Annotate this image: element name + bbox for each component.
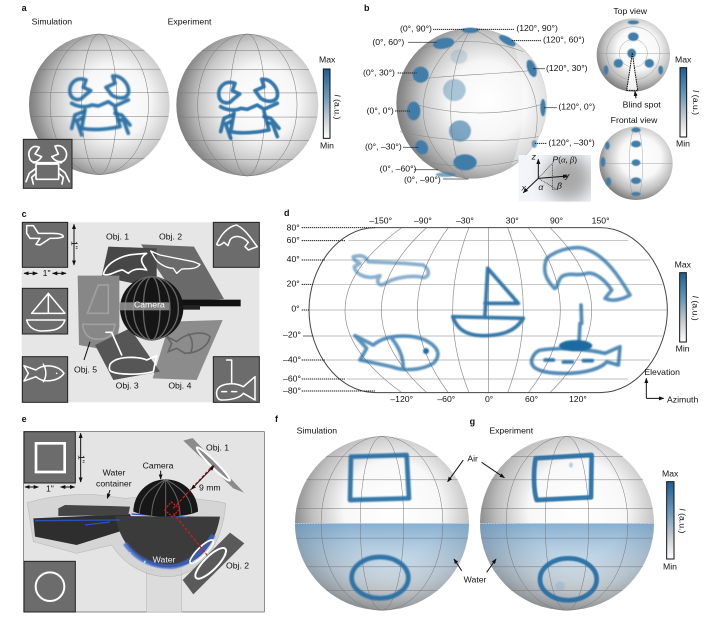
colour bar b: Min [676, 139, 690, 149]
inset: coordinate axes [518, 151, 592, 202]
azimuth tick labels: –120° [390, 394, 413, 404]
colour bar f g [662, 469, 688, 572]
tile: fish [22, 357, 68, 402]
object labels: Obj. 4 [168, 381, 192, 391]
top view sphere [597, 6, 670, 110]
tile: dolphin [213, 222, 259, 267]
colour bar d: Min [676, 344, 690, 354]
setup background [22, 222, 259, 402]
heading: Simulation: Simulation [32, 17, 72, 27]
setup background [24, 432, 264, 612]
sphere: simulation crab [29, 34, 170, 175]
air label with arrows [448, 454, 504, 482]
top view sphere: Top view [613, 6, 648, 16]
panel label e: e [22, 414, 27, 424]
inset: coordinate axes: z [531, 151, 537, 161]
water label with arrows: Water [464, 574, 487, 584]
angle labels with leaders: (120°, 0°) [558, 102, 595, 112]
angle labels with leaders: (120°, 90°) [516, 23, 558, 33]
colour bar f g: I (a.u.) [678, 508, 688, 533]
azimuth tick labels: 90° [550, 216, 563, 226]
container and water labels [96, 467, 176, 565]
tile: sailboat [22, 288, 68, 334]
elevation azimuth axes [644, 367, 698, 405]
angle labels with leaders: (0°, 0°) [367, 106, 394, 116]
panel label f: f [275, 414, 279, 424]
inset: coordinate axes: x [521, 183, 527, 193]
container and water labels: container [96, 479, 132, 489]
heading: Experiment: Experiment [168, 17, 212, 27]
colour bar b [675, 55, 701, 149]
inset: coordinate axes: β [556, 181, 562, 191]
frontal view sphere [599, 115, 673, 200]
panels f and g: air and water imaging [275, 414, 688, 610]
azimuth tick labels: –60° [437, 394, 455, 404]
panel b: angular response spots [363, 3, 701, 202]
elevation azimuth axes: Azimuth [667, 395, 698, 405]
container and water labels: Water [103, 467, 126, 477]
panel label d: d [284, 208, 290, 218]
object labels [74, 231, 192, 391]
camera sphere: Camera [134, 300, 165, 310]
colour bar f g: Min [663, 562, 677, 572]
sphere f: simulation [295, 436, 469, 610]
scale arrows 1 inch [25, 433, 86, 493]
object labels: Obj. 3 [116, 381, 139, 391]
panel c: multi-object experimental setup [22, 209, 259, 402]
scale arrows 1 inch: 1" [69, 241, 79, 249]
elevation tick labels: –60° [283, 373, 301, 383]
inset: coordinate axes: α [538, 182, 544, 192]
angle labels with leaders: (0°, 30°) [363, 67, 395, 77]
colour bar f g: Max [662, 469, 679, 479]
colour bar b: I (a.u.) [691, 90, 701, 115]
colour bar a: Min [320, 141, 334, 151]
heading: Experiment: Experiment [489, 425, 534, 435]
object 2 plate: Obj. 2 [226, 561, 249, 571]
red rays and distance: 9 mm [199, 482, 221, 492]
panel label a: a [22, 3, 28, 13]
azimuth tick labels: 30° [506, 216, 519, 226]
sphere g: experiment [480, 436, 654, 610]
colour bar b: Max [675, 55, 692, 65]
container and water labels: Water [153, 555, 176, 565]
air label with arrows: Air [467, 454, 478, 464]
angle labels with leaders: (0°, –30°) [365, 142, 402, 152]
elevation tick labels: 40° [287, 254, 300, 264]
azimuth tick labels: 60° [525, 394, 538, 404]
angle labels with leaders: (0°, 90°) [400, 23, 432, 33]
object planes [78, 244, 224, 380]
inset: coordinate axes: y [564, 170, 570, 180]
sphere: experiment crab [176, 34, 318, 176]
azimuth tick labels: –30° [456, 216, 474, 226]
object 1 plate [183, 438, 244, 493]
tile: square [24, 432, 75, 483]
scale arrows 1 inch: 1" [43, 268, 51, 278]
tile: circle [24, 561, 75, 612]
azimuth tick labels: 150° [592, 216, 610, 226]
projected object outlines [83, 251, 210, 374]
azimuth tick labels [369, 216, 610, 404]
angle labels with leaders: (120°, –30°) [548, 138, 595, 148]
elevation tick labels: –20° [283, 330, 301, 340]
panel d: panoramic projection map [283, 208, 700, 405]
angle labels with leaders: (120°, 60°) [543, 35, 585, 45]
panel label b: b [364, 3, 370, 13]
camera dome: Camera [143, 461, 174, 471]
camera sphere [119, 277, 241, 340]
water label with arrows [454, 559, 496, 584]
angle labels with leaders: (0°, –60°) [380, 164, 417, 174]
scale arrows 1 inch: 1" [46, 483, 54, 493]
angle labels with leaders [363, 23, 595, 184]
map outline and graticule [309, 228, 667, 393]
tile: submarine [213, 357, 259, 402]
colour bar a [319, 55, 343, 151]
object 2 plate [183, 533, 249, 594]
inset: crab object tile [23, 139, 72, 188]
elevation tick labels: –40° [283, 354, 301, 364]
panel e: air and water setup [22, 414, 264, 612]
colour bar a: Max [319, 55, 336, 65]
object labels: Obj. 2 [159, 231, 182, 241]
azimuth tick labels: –150° [369, 216, 392, 226]
azimuth tick labels: –90° [414, 216, 432, 226]
elevation tick labels: 80° [287, 223, 300, 233]
angle labels with leaders: (0°, –90°) [404, 174, 441, 184]
captured objects on map [353, 248, 630, 373]
elevation azimuth axes: Elevation [644, 367, 680, 377]
elevation tick labels: 0° [291, 304, 300, 314]
tile: airplane [22, 222, 68, 267]
scale arrows 1 inch [24, 224, 79, 278]
panel label c: c [22, 209, 27, 219]
inset: coordinate axes: P(α, β) [552, 154, 577, 164]
azimuth tick labels: 0° [485, 394, 493, 404]
heading: Simulation: Simulation [297, 425, 337, 435]
azimuth tick labels: 120° [569, 394, 587, 404]
angle labels with leaders: (120°, 30°) [546, 63, 588, 73]
object 1 plate: Obj. 1 [206, 443, 229, 453]
elevation tick labels: –80° [283, 386, 301, 396]
panel a: crab simulation vs experiment [22, 3, 343, 188]
elevation tick labels: 60° [287, 235, 300, 245]
large sphere with spots [396, 28, 547, 179]
object labels: Obj. 1 [106, 231, 129, 241]
top view sphere: Blind spot [623, 100, 661, 110]
elevation tick labels [283, 223, 376, 396]
red rays and distance [164, 465, 221, 557]
angle labels with leaders: (0°, 60°) [372, 37, 404, 47]
colour bar d: I (a.u.) [690, 296, 700, 321]
scale arrows 1 inch: 1" [76, 455, 86, 463]
colour bar d: Max [675, 260, 692, 270]
object labels: Obj. 5 [74, 364, 97, 374]
colour bar a: I (a.u.) [333, 94, 343, 119]
panel label g: g [470, 417, 475, 427]
frontal view sphere: Frontal view [611, 115, 658, 125]
elevation tick labels: 20° [287, 279, 300, 289]
camera dome [133, 461, 198, 517]
colour bar d [675, 260, 700, 354]
water container [27, 494, 226, 612]
